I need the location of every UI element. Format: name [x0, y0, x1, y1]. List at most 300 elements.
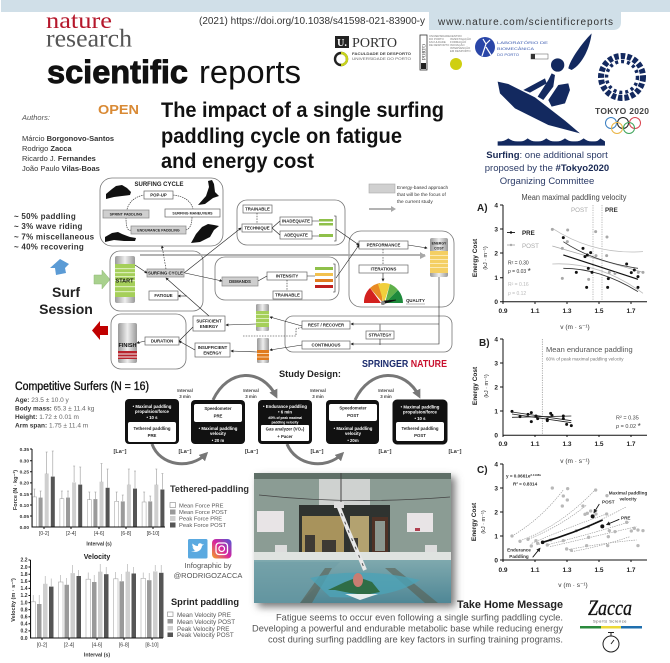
icon: recovered battery	[256, 304, 269, 331]
step: endurance paddling: Gas analyzer (VO₂)	[266, 426, 305, 432]
lactate labels: [La⁻]	[245, 449, 258, 455]
chart C: individual energy cost curves: 2	[494, 510, 498, 516]
step: endurance paddling: •60% of peak maximal	[268, 416, 302, 420]
lactate labels: [La⁻]	[448, 449, 462, 455]
chart B subtitle: 60% of peak maximal paddling velocity	[546, 356, 624, 362]
step: speedometer pre: velocity	[210, 431, 227, 436]
chart C annotations: y = 0.0661e	[506, 474, 530, 478]
sprint legend: Mean Velocity POST	[177, 619, 235, 626]
U.Porto logo: PORTO	[352, 36, 397, 51]
research centre logo: INTERVENÇÃO	[450, 45, 471, 50]
focus legend: the current study	[397, 199, 433, 205]
Zacca sports science logo: Zacca	[588, 595, 632, 620]
take home message text: Developing a powerful and endurable metabolic base while reducing energy	[252, 624, 563, 634]
panel: finish	[111, 314, 186, 369]
energy availability boxes: ENERGY	[200, 324, 218, 329]
chart: tethered force bars: [2-4]	[66, 531, 77, 537]
step: speedometer post: • Maximal paddling	[334, 426, 373, 431]
step: tethered pre: • Maximal paddling	[133, 404, 172, 409]
chart: velocity bars: 2.2	[21, 558, 28, 564]
chart C: individual energy cost curves: 3	[494, 486, 498, 492]
step: speedometer pre	[191, 400, 245, 444]
sprint legend: Peak Velocity PRE	[177, 626, 230, 633]
chart: velocity bars: 0.4	[21, 622, 28, 628]
chart B statistics: *	[638, 422, 641, 431]
chart: tethered force bars: Force (N · kg⁻¹)	[12, 470, 19, 510]
chart: velocity bars: 1.0	[21, 600, 28, 606]
springer nature logo: SPRINGER NATURE	[362, 359, 447, 370]
chart: tethered force bars: Interval (s)	[86, 542, 112, 548]
icon: energy cost battery: ENERGY	[432, 242, 447, 246]
chart A: maximal velocity scatter: 4	[494, 202, 498, 210]
chart C: individual energy cost curves: 0	[494, 558, 498, 564]
chart: velocity bars: 2.0	[21, 565, 28, 571]
infographic credit	[174, 561, 242, 580]
chart A legend: PRE	[522, 230, 535, 237]
Tokyo 2020 logo: TOKYO 2020	[595, 106, 649, 116]
focus legend: Energy-based approach	[397, 185, 449, 191]
step: speedometer post	[326, 400, 379, 444]
chart C: individual energy cost curves: 1	[494, 534, 498, 540]
icon: twitter	[188, 539, 208, 558]
chart: tethered force bars: 0.35	[20, 447, 29, 453]
chart A: maximal velocity scatter: 3	[494, 226, 498, 234]
chart C: individual energy cost curves: 0.9	[498, 567, 508, 574]
lactate labels: [La⁻]	[178, 449, 192, 455]
energy availability boxes	[193, 316, 230, 357]
chart A: maximal velocity scatter: 1.7	[626, 308, 636, 315]
chart: velocity bars: 0.2	[21, 628, 28, 634]
authors: Ricardo J. Fernandes	[22, 154, 96, 163]
U.Porto logo: UNIVERSIDADE DO PORTO	[352, 57, 411, 61]
chart C: individual energy cost curves: (kJ · m⁻¹)	[481, 510, 487, 534]
tethered paddling heading: Tethered-paddling	[170, 484, 249, 495]
take home message text: cost during surfing paddling are key factors in surfing training programs.	[268, 634, 563, 644]
title: paddling cycle on fatigue	[161, 124, 402, 148]
chart: velocity bars: [4-6]	[92, 642, 103, 648]
chart: tethered force bars: [8-10]	[147, 531, 160, 537]
panel: technique: ADEQUATE	[284, 233, 308, 238]
chart C annotations: Endurance	[507, 548, 531, 552]
chart B: endurance velocity scatter: 1.5	[594, 441, 604, 448]
participants characteristics	[15, 397, 95, 430]
step: tethered post: • 10 s	[414, 416, 426, 421]
step: tethered pre: propulsion/force	[135, 409, 170, 414]
panel: performance: PERFORMANCE	[367, 243, 400, 248]
panel: recovery strategy: STRATEGY	[368, 333, 392, 338]
step: tethered post: propulsion/force	[403, 410, 438, 414]
icon: blue up arrow	[50, 259, 69, 275]
chart B statistics: p = 0.02	[616, 424, 636, 430]
panel: surfing cycle: POP-UP	[150, 193, 167, 198]
infographic credit: Infographic by	[184, 561, 232, 570]
chart C: individual energy cost curves: C)	[477, 465, 488, 476]
chart: tethered force bars	[12, 447, 165, 548]
icon: surfer top right	[198, 180, 219, 205]
biomechanics laboratory logo: BIOMECÂNICA	[497, 46, 534, 51]
step: tethered pre: • 10 s	[146, 415, 158, 420]
chart A: maximal velocity scatter: Energy Cost	[472, 238, 479, 277]
flow arcs	[152, 375, 419, 464]
panel: surfing cycle: SURFING MANEUVERS	[172, 212, 213, 216]
journal url: www.nature.com/scientificreports	[437, 17, 613, 28]
chart: tethered force bars: 0.10	[20, 503, 29, 509]
interval labels: 3 min	[179, 394, 191, 399]
step: speedometer post: • 20m	[347, 438, 359, 443]
chart: tethered force bars: 0.05	[20, 514, 29, 520]
tethered legend: Peak Force PRE	[179, 516, 222, 522]
biomechanics laboratory logo: DO PORTO	[497, 52, 519, 57]
scientific reports masthead	[47, 54, 301, 90]
chart A legend: *	[528, 267, 531, 276]
panel: demands: INTENSITY	[276, 274, 298, 279]
chart A: maximal velocity scatter: 0.9	[498, 308, 508, 315]
interval labels: 3 min	[245, 394, 257, 399]
infographic credit: @RODRIGOZACCA	[174, 571, 242, 580]
icon: start battery: START	[116, 278, 134, 284]
step: tethered pre	[125, 399, 179, 444]
authors: João Paulo Vilas-Boas	[22, 164, 100, 173]
chart A legend	[507, 230, 539, 297]
chart: tethered force bars: 0.30	[20, 458, 29, 464]
chart A: maximal velocity scatter: 0	[494, 299, 498, 306]
panel: technique: TECHNIQUE	[244, 226, 270, 231]
icon: quality gauge	[364, 283, 403, 305]
surf session label: Surf	[52, 284, 80, 300]
chart: tethered force bars: 0.15	[20, 492, 29, 498]
time motion percentages: ~ 40% recovering	[14, 242, 84, 252]
step: endurance paddling	[258, 400, 312, 444]
chart: velocity bars: Velocity (m · s⁻¹)	[10, 578, 17, 622]
chart A: maximal velocity scatter: 1.1	[530, 308, 540, 315]
chart: velocity bars: 1.8	[21, 572, 28, 578]
chart B: endurance velocity scatter: 3	[494, 360, 498, 368]
time motion percentages: ~ 50% paddling	[14, 212, 76, 221]
icon: red arrow out	[92, 321, 108, 340]
sprint legend	[168, 612, 235, 639]
participants characteristics: Arm span: 1.75 ± 11.4 m	[15, 422, 88, 430]
panel: performance: ITERATIONS	[371, 267, 396, 272]
surf session label	[39, 284, 93, 317]
chart A legend: p = 0.12	[507, 291, 526, 297]
chart A: maximal velocity scatter: 2	[494, 250, 498, 258]
take home message text: Fatigue seems to occur even following a single surfing paddling cycle.	[276, 612, 563, 622]
icon: instagram	[212, 539, 232, 558]
participants characteristics: Age: 23.5 ± 10.0 y	[15, 397, 70, 404]
tethered legend: Mean Force POST	[179, 510, 228, 516]
chart: velocity bars: 1.6	[21, 579, 28, 585]
chart: tethered force bars: [0-2]	[39, 531, 50, 537]
icon: paddler top	[106, 185, 131, 199]
participants heading: Competitive Surfers (N = 16)	[15, 381, 149, 393]
chart: velocity bars: 1.4	[21, 586, 28, 592]
interval labels: 3 min	[312, 394, 324, 399]
panel: recovery strategy: CONTINUOUS	[312, 343, 341, 348]
step: tethered pre: PRE	[148, 433, 157, 438]
authors	[21, 113, 114, 173]
chart C: individual energy cost curves: 1.7	[626, 567, 636, 574]
chart: velocity bars: [6-8]	[119, 642, 130, 648]
step: tethered post: • Maximal paddling	[401, 404, 440, 410]
chart A: maximal velocity scatter: v (m · s⁻¹)	[560, 324, 590, 331]
panel: technique: TRAINABLE	[245, 207, 270, 212]
chart C: individual energy cost curves	[471, 462, 647, 589]
surfing caption: proposed by the #Tokyo2020	[485, 163, 609, 174]
step: speedometer post: POST	[347, 413, 359, 418]
chart B statistics: R² = 0.35	[616, 416, 639, 422]
chart C mean curve	[543, 520, 603, 542]
chart C annotations: Paddling	[509, 554, 529, 559]
panel: start: SURFING CYCLE	[148, 271, 183, 276]
research centre logo: DO PORTO	[429, 37, 445, 41]
step: tethered post: POST	[414, 433, 426, 438]
research centre logo: EM DESPORTO	[450, 49, 471, 53]
title	[161, 98, 444, 173]
sprint legend: Peak Velocity POST	[177, 632, 234, 639]
icon: surfer bottom right	[191, 224, 219, 243]
study design flow	[114, 375, 462, 464]
sprint paddling heading: Sprint paddling	[171, 597, 239, 607]
title: and energy cost	[161, 149, 314, 173]
chart B: endurance velocity scatter: 1.1	[530, 441, 540, 448]
chart C annotations: POST	[602, 500, 615, 504]
lactate labels: [La⁻]	[310, 449, 324, 455]
lactate labels	[114, 449, 462, 455]
chart A legend: R² = 0.30	[508, 260, 529, 266]
chart C annotations: Maximal paddling	[609, 490, 647, 496]
interval labels: Interval	[378, 388, 394, 393]
step: speedometer pre: • Maximal paddling	[199, 426, 238, 431]
panel: demands: DEMANDS	[229, 279, 251, 284]
biomechanics laboratory logo: LABORATÓRIO DE	[497, 40, 548, 45]
tethered legend	[170, 502, 228, 529]
chart: tethered force bars: 0.00	[20, 525, 29, 531]
chart B: endurance velocity scatter: B)	[479, 338, 490, 349]
chart B: endurance velocity scatter: 0	[494, 432, 498, 440]
chart: velocity bars: 0.8	[21, 608, 28, 614]
nature research logo: research	[46, 26, 133, 52]
tethered legend: Peak Force POST	[179, 523, 226, 529]
chart: tethered force bars: 0.20	[20, 480, 29, 486]
research centre logo	[420, 34, 472, 70]
step: speedometer post: velocity	[345, 431, 362, 436]
chart: velocity bars: [0-2]	[37, 642, 48, 648]
take home message text	[252, 612, 563, 644]
step: speedometer pre: Speedometer	[204, 406, 232, 411]
chart B: endurance velocity scatter: 4	[494, 336, 498, 344]
chart C: individual energy cost curves: v (m · s⁻¹)	[558, 582, 588, 589]
panel: finish: DURATION	[151, 339, 173, 344]
study design heading: Study Design:	[279, 369, 341, 379]
participants characteristics: Body mass: 65.3 ± 11.4 kg	[15, 406, 95, 412]
take home message heading: Take Home Message	[457, 599, 563, 611]
surf session label: Session	[39, 301, 93, 317]
chart: velocity bars	[10, 554, 164, 658]
surfing caption: Surfing: one additional sport	[486, 150, 608, 161]
chart B: endurance velocity scatter: 1	[494, 408, 498, 416]
photo: tethered swimmer in pool	[254, 473, 455, 607]
step: speedometer post: Speedometer	[339, 406, 367, 410]
research centre logo: INVESTIGAÇÃO	[450, 36, 472, 41]
chart B: endurance velocity scatter	[472, 336, 647, 465]
research centre logo: UNIVERSIDADE	[429, 34, 450, 38]
chart A: maximal velocity scatter: PRE	[605, 207, 618, 214]
panel: surfing cycle: SURFING CYCLE	[134, 182, 184, 188]
time motion percentages: ~ 7% miscellaneous	[14, 232, 95, 242]
chart B: endurance velocity scatter: 1.7	[626, 441, 636, 448]
chart B: endurance velocity scatter: v (m · s⁻¹)	[560, 458, 590, 465]
authors: Authors:	[21, 113, 50, 122]
tethered legend: Mean Force PRE	[179, 504, 224, 510]
panel: surfing cycle	[100, 178, 223, 246]
panel: technique	[237, 200, 345, 245]
chart C annotations	[506, 473, 647, 559]
energy availability boxes: INSUFFICIENT	[198, 345, 228, 350]
research centre logo: INOVAÇÃO	[450, 42, 465, 47]
research centre logo: CENTRO	[450, 34, 463, 38]
Zacca sports science logo	[580, 595, 642, 652]
chart C: individual energy cost curves: 4	[494, 462, 498, 468]
chart: tethered force bars: [6-8]	[121, 531, 132, 537]
citation doi: (2021) https://doi.org/10.1038/s41598-021-83900-y	[199, 15, 426, 27]
chart B: endurance velocity scatter: (kJ · m⁻¹)	[484, 374, 490, 398]
panel: technique: INADEQUATE	[282, 219, 310, 224]
step: endurance paddling: • 6 min	[278, 410, 292, 414]
step: endurance paddling: • Endurance paddling	[263, 404, 307, 409]
chart C: individual energy cost curves: Energy Cost	[471, 502, 478, 541]
step: tethered post	[393, 400, 447, 444]
panel: surfing cycle: ENDURANCE PADDLING	[137, 229, 180, 233]
chart C annotations: 2.1198x	[530, 473, 541, 477]
research centre logo: FORMAÇÃO	[450, 39, 467, 44]
chart A: maximal velocity scatter	[472, 193, 647, 331]
chart A: maximal velocity scatter: POST	[571, 207, 588, 214]
chart C annotations: PRE	[621, 516, 630, 520]
chart A legend: POST	[522, 243, 539, 250]
chart A: maximal velocity scatter: 1.3	[562, 308, 572, 315]
chart C: individual energy cost curves: 1.5	[594, 567, 604, 574]
U.Porto logo: U.	[337, 38, 347, 49]
chart: velocity bars: 0.0	[21, 636, 28, 642]
icon: stopwatch	[603, 632, 619, 652]
research centre logo: DE DESPORTO	[429, 43, 450, 47]
surfing caption: Organizing Committee	[500, 176, 594, 187]
panel: demands	[215, 257, 339, 300]
panel: recovery strategy: REST / RECOVER	[308, 323, 345, 328]
authors: Márcio Borgonovo-Santos	[22, 134, 114, 143]
chart B title: Mean endurance paddling	[546, 345, 633, 354]
chart A: maximal velocity scatter: 1	[494, 275, 498, 282]
panel: start	[110, 251, 203, 311]
participants characteristics: Height: 1.72 ± 0.01 m	[15, 414, 79, 421]
Tokyo 2020 logo	[595, 56, 649, 134]
lactate labels: [La⁻]	[378, 449, 392, 455]
step: endurance paddling: paddling velocity	[272, 420, 299, 424]
time motion percentages	[14, 212, 95, 252]
nature research logo	[46, 8, 133, 52]
icon: finish battery: FINISH	[118, 343, 137, 349]
chart C annotations: R² = 0.8314	[513, 482, 538, 486]
chart A: maximal velocity scatter: (kJ · m⁻¹)	[483, 246, 489, 270]
title: The impact of a single surfing	[161, 98, 444, 122]
chart B: endurance velocity scatter: 2	[494, 384, 498, 392]
Zacca sports science logo: Sports Science	[593, 618, 627, 624]
sprint legend: Mean Velocity PRE	[177, 612, 231, 619]
icon: energy cost battery: COST	[434, 246, 445, 250]
scientific reports masthead: reports	[199, 54, 301, 90]
icon: depleted battery	[257, 338, 269, 363]
open label: OPEN	[98, 102, 139, 117]
chart B: endurance velocity scatter: Energy Cost	[472, 366, 479, 405]
chart: tethered force bars: 0.25	[20, 470, 29, 476]
chart A legend: p = 0.03	[508, 269, 526, 275]
chart B statistics	[615, 416, 641, 431]
interval labels	[177, 388, 394, 399]
focus legend	[369, 184, 449, 212]
chart title: velocity: Velocity	[84, 554, 110, 561]
icon: green arrow in	[94, 270, 110, 289]
chart A: maximal velocity scatter: 1.5	[594, 308, 604, 315]
chart B: endurance velocity scatter: 0.9	[498, 441, 508, 448]
chart: velocity bars: [8-10]	[145, 642, 159, 648]
surfing caption	[485, 150, 609, 187]
chart B: endurance velocity scatter: 1.3	[562, 441, 572, 448]
flow connectors	[135, 228, 439, 352]
time motion percentages: ~ 3% wave riding	[14, 222, 83, 231]
nature research logo: nature	[46, 8, 112, 33]
panel: performance	[349, 231, 454, 307]
interval labels: Interval	[243, 388, 259, 393]
energy availability boxes: SUFFICIENT	[196, 318, 222, 324]
U.Porto logo: FACULDADE DE DESPORTO	[352, 52, 411, 56]
chart C: individual energy cost curves: 1.3	[562, 567, 572, 574]
chart: tethered force bars: [4-6]	[94, 531, 105, 537]
panel: start: FATIGUE	[154, 293, 173, 298]
chart A: maximal velocity scatter: A)	[477, 203, 488, 214]
research centre logo: PORTO	[422, 44, 428, 60]
energy availability boxes: ENERGY	[203, 350, 222, 356]
icon: surfing pictogram	[498, 33, 605, 146]
scientific reports masthead: scientific	[47, 54, 188, 90]
biomechanics laboratory logo	[475, 37, 548, 59]
panel: performance: QUALITY	[406, 298, 425, 303]
interval labels: 3 min	[380, 394, 392, 399]
focus legend: that will be the focus of	[397, 192, 446, 198]
lactate labels: [La⁻]	[114, 449, 127, 455]
interval labels: Interval	[310, 388, 326, 393]
icon: energy cost battery	[430, 238, 448, 277]
research centre logo: FACULDADE	[429, 40, 446, 44]
chart: velocity bars: [2-4]	[64, 642, 75, 648]
step: tethered pre: Tethered paddling	[134, 426, 171, 431]
chart: velocity bars: 1.2	[21, 593, 28, 599]
chart: velocity bars: Interval (s)	[84, 652, 110, 658]
authors: Rodrigo Zacca	[22, 144, 72, 153]
step: tethered post: Tethered paddling	[402, 426, 439, 431]
panel: demands: TRAINABLE	[275, 293, 300, 298]
panel: surfing cycle: SPRINT PADDLING	[110, 213, 143, 217]
chart: velocity bars: 0.6	[21, 614, 28, 620]
interval labels: Interval	[177, 388, 193, 393]
panel: recovery strategy	[285, 316, 452, 352]
chart A title: Mean maximal paddling velocity	[522, 193, 627, 202]
chart A legend: R² = 0.16	[508, 282, 529, 288]
header band	[1, 0, 670, 30]
chart C annotations: velocity	[619, 496, 637, 502]
chart C: individual energy cost curves: 1.1	[530, 567, 540, 574]
step: speedometer pre: PRE	[214, 414, 223, 418]
U.Porto logo	[335, 36, 411, 65]
